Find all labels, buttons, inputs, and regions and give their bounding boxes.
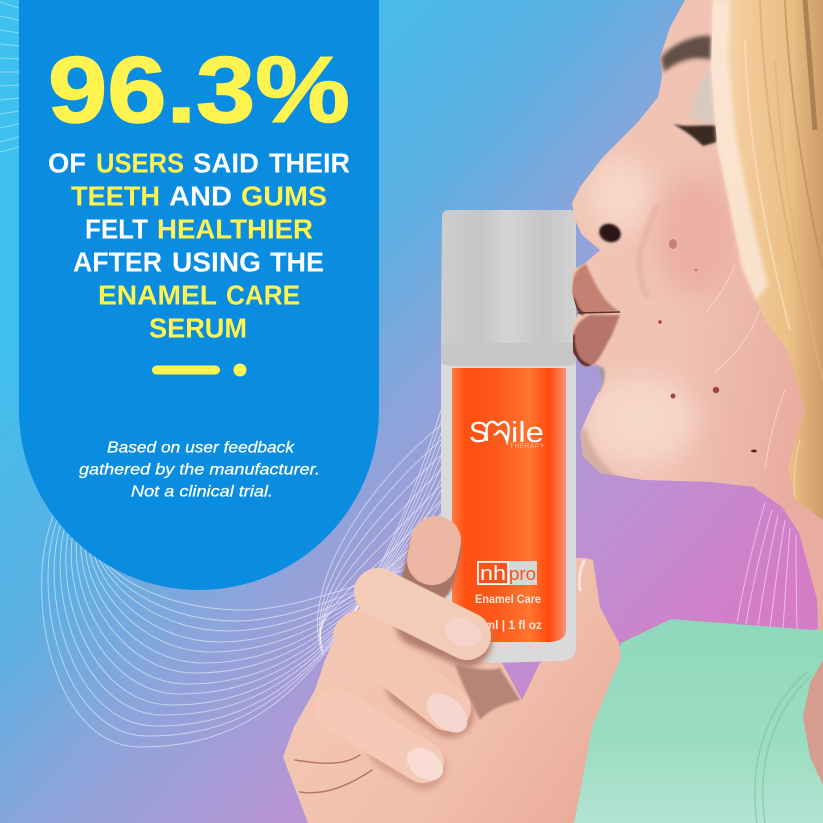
text block: disclaimer: Based on user feedback	[107, 440, 295, 456]
shadow between fingers	[455, 664, 520, 720]
text block: statistic description: THEIR	[269, 148, 350, 178]
panel: blue statistic card	[19, 0, 379, 590]
text block: statistic description: USERS	[96, 148, 184, 178]
nose highlight	[588, 157, 652, 233]
ring fingernail	[401, 741, 449, 787]
decorative wave lines near neck	[737, 503, 797, 630]
cheek blush	[657, 175, 733, 295]
product name: Enamel Care	[475, 594, 541, 606]
text block: statistic description: THE	[270, 246, 324, 278]
neck skin at collar	[803, 660, 823, 785]
text block: statistic description: AND	[169, 180, 232, 212]
text block: statistic description: CARE	[226, 280, 300, 310]
text block: disclaimer	[79, 440, 320, 500]
nostril	[598, 222, 622, 244]
text block: statistic description: GUMS	[241, 180, 327, 212]
bottle body	[441, 362, 576, 663]
index finger	[378, 592, 467, 636]
lower lip	[572, 315, 620, 366]
hand: palm and thumb behind bottle	[283, 558, 621, 823]
text block: disclaimer: gathered by the manufacturer.	[79, 462, 320, 478]
logo: nhpro: pro	[509, 564, 536, 584]
index fingernail	[440, 611, 486, 653]
text block: statistic description: SERUM	[149, 312, 247, 344]
index finger shadow	[420, 622, 467, 642]
bottle cap collar	[441, 342, 576, 366]
text block: statistic description: TEETH	[71, 180, 160, 212]
logo: Smile Therapy: S	[469, 417, 488, 449]
bottle cap	[441, 210, 576, 343]
upper lip	[572, 264, 620, 313]
moles	[658, 239, 757, 452]
heading: 96.3%: 96.3%	[48, 37, 350, 142]
middle finger shadow	[410, 685, 450, 714]
eyebrow	[661, 36, 712, 72]
text block: statistic description: ENAMEL	[98, 280, 217, 310]
ring finger	[336, 710, 423, 762]
logo: nhpro: nh	[480, 563, 506, 585]
logo: Smile Therapy: ile	[511, 417, 544, 449]
bottle	[441, 210, 576, 663]
person: hair	[706, 0, 823, 520]
jaw shadow	[580, 428, 616, 476]
text block: statistic description: OF	[48, 148, 86, 178]
orange serum	[452, 368, 566, 642]
text block: statistic description: FELT	[85, 214, 148, 244]
lip shadow	[596, 365, 605, 394]
volume label: 30 ml | 1 fl oz	[468, 620, 542, 632]
middle fingernail	[419, 686, 475, 740]
text block: statistic description: SAID	[193, 148, 259, 178]
text block: statistic description: AFTER	[73, 246, 162, 278]
logo: nhpro	[477, 561, 537, 585]
lip edge shadow	[573, 298, 590, 366]
hand: fingers in front of bottle	[295, 541, 584, 793]
text block: statistic description: USING	[172, 246, 261, 278]
text block: statistic description: HEALTHIER	[157, 214, 313, 244]
person: t-shirt	[574, 619, 823, 823]
lip line	[578, 312, 620, 313]
palm crease	[295, 755, 372, 793]
text block: statistic description	[48, 148, 350, 344]
decorative wave lines lower left	[0, 2, 441, 747]
upper fingertip	[432, 541, 436, 560]
logo tooth mark	[486, 422, 509, 441]
middle finger	[356, 636, 448, 708]
chin highlight	[585, 375, 695, 465]
logo: Smile Therapy: THERAPY	[510, 444, 544, 450]
ring finger shadow	[390, 748, 424, 768]
person: face and neck	[572, 0, 823, 630]
text block: disclaimer: Not a clinical trial.	[131, 484, 273, 500]
upper fingertip shadow	[428, 550, 435, 578]
collar seam	[755, 672, 811, 823]
nose crease	[639, 205, 657, 298]
logo: Smile Therapy	[469, 417, 544, 450]
eyelashes	[673, 124, 718, 146]
eye socket	[690, 68, 714, 125]
divider: dash and dot	[152, 364, 246, 376]
thumb nail	[579, 561, 584, 590]
